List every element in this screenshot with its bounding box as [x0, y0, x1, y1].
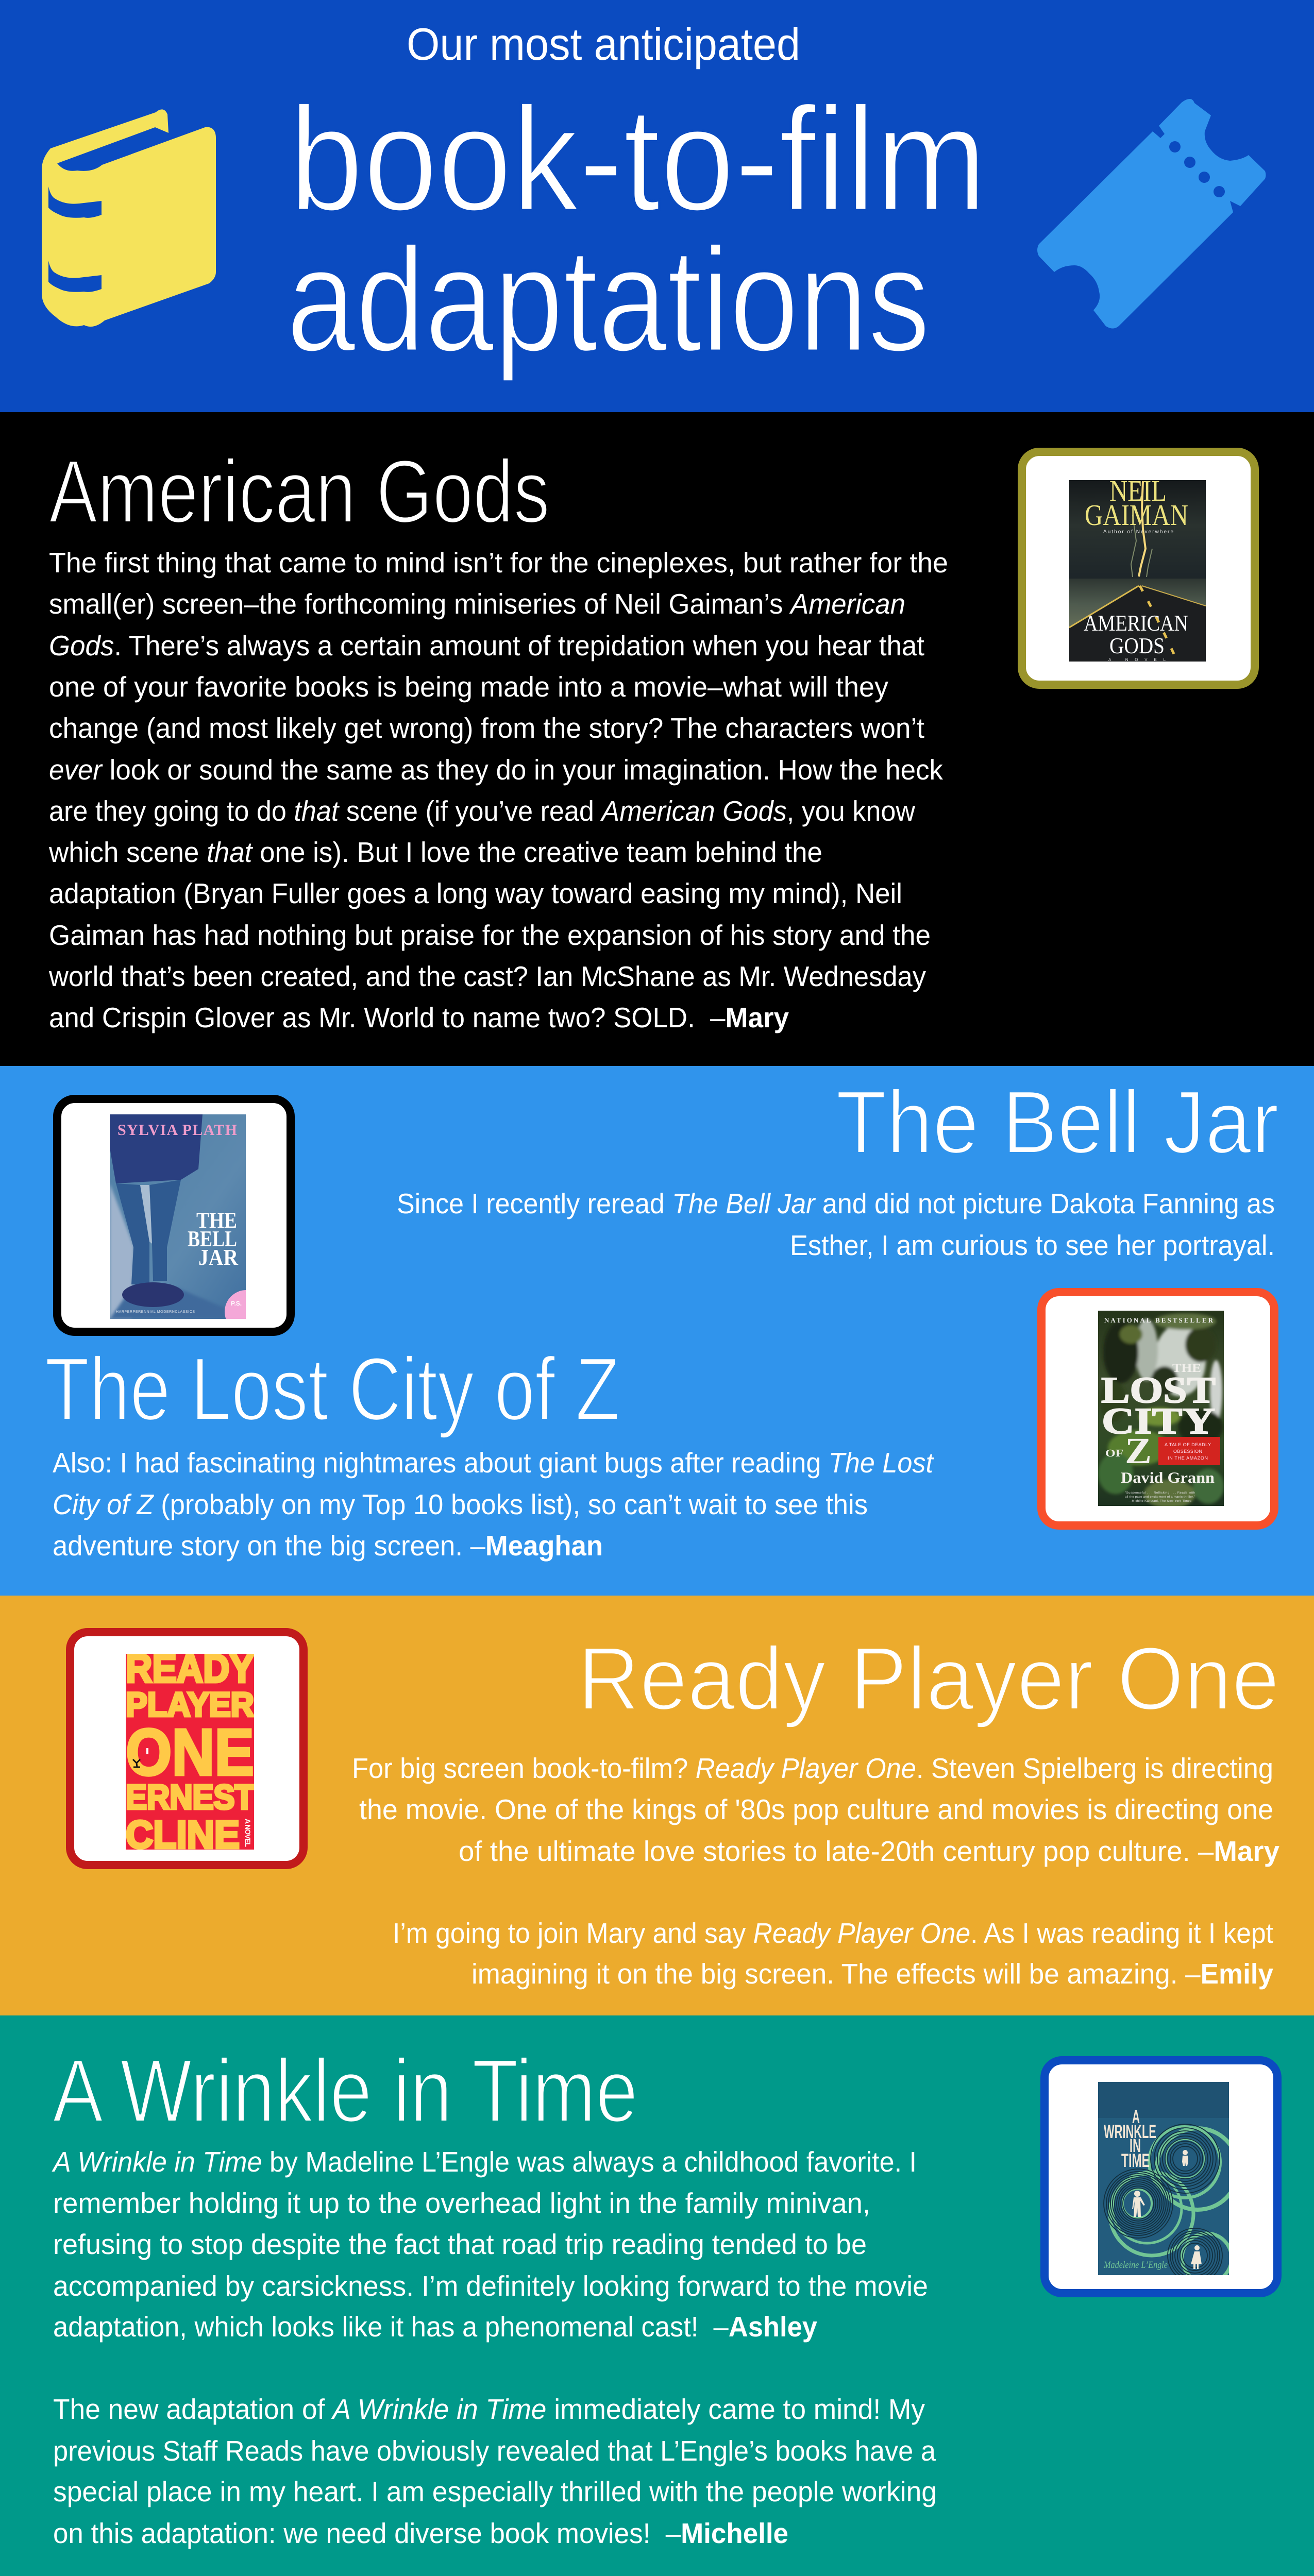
book card: American Gods: AMERICAN	[1084, 611, 1188, 636]
book card: A Wrinkle in Time: IN	[1130, 2135, 1141, 2156]
body text: The Lost City of Z: Also: I had fascinating nightmares about giant bugs after reading The Lost	[53, 1447, 935, 1479]
body text: American Gods: The first thing that came to mind isn’t for the cineplexes, but rather for the	[49, 547, 948, 579]
heading: A Wrinkle in Time: A Wrinkle in Time	[53, 2040, 638, 2141]
body text: American Gods: one of your favorite books is being made into a movie–what will they	[49, 671, 888, 703]
heading: The Lost City of Z: The Lost City of Z	[45, 1338, 620, 1439]
body text: American Gods: and Crispin Glover as Mr. World to name two? SOLD. –Mary	[49, 1002, 789, 1033]
heading: The Bell Jar: The Bell Jar	[836, 1072, 1279, 1172]
body text: The Bell Jar	[397, 1188, 1275, 1261]
book card: The Lost City of Z: —Michiko Kakutani, The New York Times	[1128, 1499, 1191, 1503]
body text: A Wrinkle in Time: previous Staff Reads have obviously revealed that L’Engle’s books have a	[53, 2435, 936, 2467]
panel: Ready Player One	[0, 1596, 1314, 2015]
book card: Ready Player One	[70, 1632, 304, 1865]
book card: The Bell Jar: BELL	[188, 1226, 237, 1251]
book card: The Lost City of Z: “Suspenseful . . . Rollicking . . . Reads with	[1125, 1491, 1195, 1495]
book card: Ready Player One: READY	[126, 1646, 254, 1691]
body text: American Gods: ever look or sound the same as they do in your imagination. How the heck	[49, 754, 943, 786]
book card: The Lost City of Z: CITY	[1102, 1400, 1215, 1442]
body text: American Gods: small(er) screen–the forthcoming miniseries of Neil Gaiman’s American	[49, 588, 905, 620]
book card: A Wrinkle in Time: A	[1132, 2106, 1140, 2127]
panel: header	[0, 0, 1314, 412]
book card: A Wrinkle in Time: TIME	[1121, 2150, 1150, 2171]
book card: Ready Player One: ERNEST	[126, 1778, 254, 1817]
book card: The Lost City of Z: Z	[1125, 1430, 1152, 1471]
body text: The Lost City of Z	[53, 1447, 935, 1562]
kicker: Our most anticipated: Our most anticipated	[407, 19, 800, 70]
book card: The Lost City of Z	[1041, 1292, 1274, 1526]
book card: The Lost City of Z: LOST	[1101, 1369, 1216, 1411]
body text: A Wrinkle in Time: The new adaptation of A Wrinkle in Time immediately came to mind! My	[53, 2393, 925, 2425]
book card: Ready Player One: CLINE	[126, 1813, 240, 1857]
book card: The Bell Jar: SYLVIA PLATH	[117, 1122, 237, 1139]
body text: American Gods	[48, 547, 948, 1033]
title	[287, 76, 987, 383]
body text: A Wrinkle in Time: adaptation, which looks like it has a phenomenal cast! –Ashley	[53, 2311, 817, 2343]
book card: American Gods: A NOVEL	[1108, 657, 1166, 662]
book card: The Bell Jar: JAR	[198, 1245, 239, 1270]
book card: A Wrinkle in Time: WRINKLE	[1104, 2121, 1156, 2142]
body text: Ready Player One: of the ultimate love stories to late-20th century pop culture. –Mary	[459, 1835, 1279, 1867]
body text: A Wrinkle in Time: refusing to stop despite the fact that road trip reading tended to be	[53, 2228, 867, 2260]
body text: A Wrinkle in Time: A Wrinkle in Time by Madeline L’Engle was always a childhood favorite. I	[52, 2146, 917, 2178]
book card: Ready Player One: ONE	[126, 1716, 254, 1789]
body text: American Gods: Gaiman has had nothing but praise for the expansion of his story and the	[49, 919, 931, 951]
body text: American Gods: are they going to do that scene (if you’ve read American Gods, you know	[49, 795, 915, 827]
book card: A Wrinkle in Time: Madeleine L’Engle	[1103, 2260, 1168, 2270]
body text: A Wrinkle in Time	[52, 2146, 937, 2549]
book card: The Lost City of Z: OBSESSION	[1173, 1449, 1202, 1454]
body text: The Lost City of Z: City of Z (probably on my Top 10 books list), so can’t wait to see this	[53, 1488, 868, 1520]
book card: American Gods: GODS	[1109, 633, 1165, 658]
body text: A Wrinkle in Time: on this adaptation: we need diverse book movies! –Michelle	[53, 2517, 788, 2549]
book card: The Bell Jar	[57, 1099, 291, 1333]
icon: blue ticket	[1037, 99, 1266, 329]
body text: A Wrinkle in Time: accompanied by carsickness. I’m definitely looking forward to the movie	[53, 2270, 928, 2302]
book card: The Lost City of Z: David Grann	[1121, 1469, 1215, 1486]
body text: Ready Player One	[352, 1752, 1279, 1990]
heading: Ready Player One: Ready Player One	[578, 1628, 1279, 1728]
body text: American Gods: adaptation (Bryan Fuller goes a long way toward easing my mind), Neil	[49, 877, 902, 909]
body text: Ready Player One: imagining it on the big screen. The effects will be amazing. –Emily	[471, 1958, 1273, 1990]
title: adaptations	[287, 217, 930, 383]
body text: The Bell Jar: Esther, I am curious to see her portrayal.	[790, 1229, 1275, 1261]
book card: American Gods	[1022, 452, 1255, 685]
book card: The Lost City of Z: IN THE AMAZON	[1168, 1455, 1208, 1461]
book card: The Lost City of Z: THE	[1172, 1362, 1201, 1375]
book card: The Bell Jar: HARPERPERENNIAL MODERNCLASSICS	[116, 1310, 195, 1314]
body text: A Wrinkle in Time: remember holding it up to the overhead light in the family minivan,	[53, 2187, 870, 2219]
body text: The Bell Jar: Since I recently reread The Bell Jar and did not picture Dakota Fanning as	[397, 1188, 1275, 1219]
book card: American Gods: NEIL	[1109, 474, 1167, 507]
body text: A Wrinkle in Time: special place in my heart. I am especially thrilled with the people working	[53, 2476, 937, 2507]
book card: The Lost City of Z: A TALE OF DEADLY	[1165, 1442, 1211, 1447]
book card: A Wrinkle in Time	[1045, 2060, 1277, 2293]
panel: American Gods	[0, 412, 1314, 1066]
book card: The Bell Jar: P.S.	[231, 1300, 242, 1307]
panel: A Wrinkle in Time	[0, 2015, 1314, 2576]
body text: Ready Player One: the movie. One of the kings of '80s pop culture and movies is directing one	[359, 1793, 1273, 1825]
body text: The Lost City of Z: adventure story on the big screen. –Meaghan	[53, 1530, 603, 1562]
body text: American Gods: Gods. There’s always a certain amount of trepidation when you hear that	[49, 630, 924, 662]
book card: American Gods: GAIMAN	[1085, 498, 1188, 532]
book card: Ready Player One: PLAYER	[126, 1685, 254, 1723]
book card: American Gods: Author of Neverwhere	[1103, 529, 1173, 535]
heading: American Gods: American Gods	[49, 441, 550, 541]
body text: Ready Player One: For big screen book-to-film? Ready Player One. Steven Spielberg is directing	[352, 1752, 1273, 1784]
body text: American Gods: world that’s been created, and the cast? Ian McShane as Mr. Wednesday	[48, 960, 926, 992]
body text: Ready Player One: I’m going to join Mary and say Ready Player One. As I was reading it I kept	[393, 1917, 1273, 1949]
book card: The Lost City of Z: NATIONAL BESTSELLER	[1104, 1316, 1214, 1324]
panel: The Bell Jar and The Lost City of Z	[0, 1066, 1314, 1596]
body text: American Gods: which scene that one is). But I love the creative team behind the	[48, 836, 822, 868]
body text: American Gods: change (and most likely get wrong) from the story? The characters won’t	[49, 712, 924, 744]
icon: yellow book	[42, 109, 216, 327]
book card: Ready Player One: A NOVEL	[244, 1819, 252, 1847]
book card: The Bell Jar: THE	[196, 1208, 237, 1233]
book card: The Lost City of Z: OF	[1105, 1448, 1123, 1459]
title: book-to-film	[289, 76, 987, 242]
book card: The Lost City of Z: all the pace and excitement of a manic thriller.”	[1125, 1495, 1195, 1499]
